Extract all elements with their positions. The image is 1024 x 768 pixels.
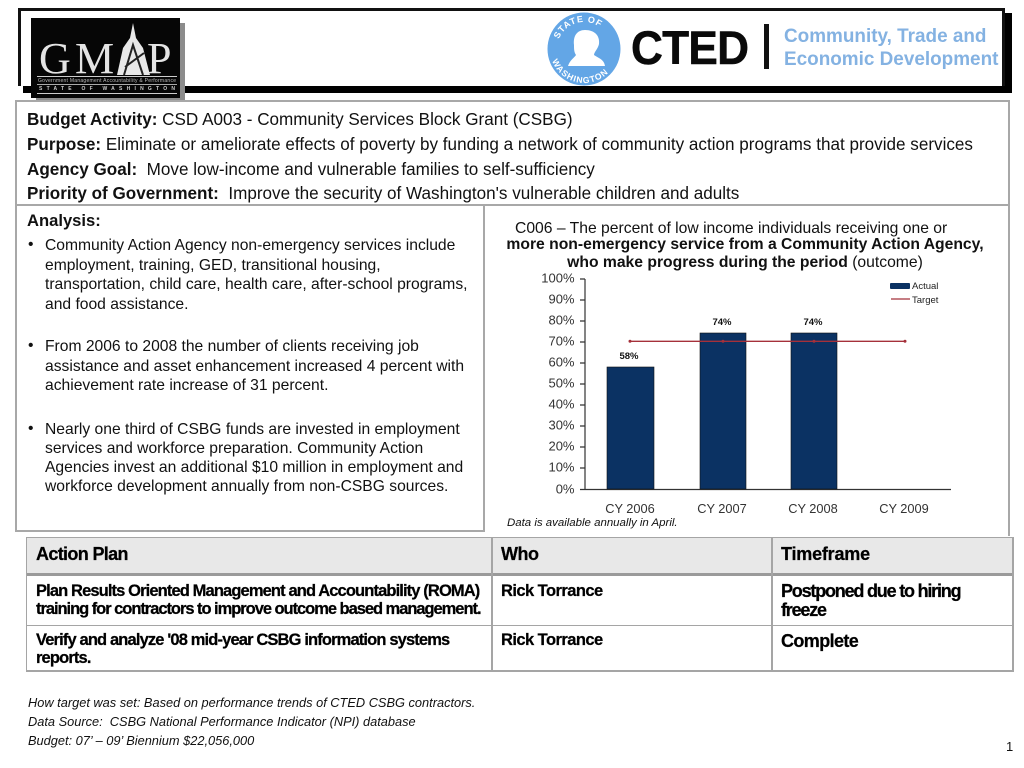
bullet 2: assistance and asset enhancement increased 4 percent with bbox=[45, 358, 464, 375]
logo: GMAP: M bbox=[75, 34, 114, 83]
y axis labels: 40% bbox=[548, 396, 575, 412]
chart title bbox=[506, 220, 984, 271]
y axis labels bbox=[541, 270, 575, 496]
bullet 3: • bbox=[28, 420, 33, 437]
bullet 3: Agencies invest an additional $10 million in employment and bbox=[45, 459, 463, 476]
icon: state of Washington seal bbox=[548, 12, 620, 86]
priority of government line: Priority of Government: Improve the security of Washington's vulnerable children and adults bbox=[27, 184, 739, 203]
bullet 3: workforce development annually from non-CSBG sources. bbox=[45, 478, 448, 495]
x axis labels: CY 2007 bbox=[697, 501, 747, 516]
header: who: Who bbox=[501, 544, 538, 564]
chart title: C006 – The percent of low income individuals receiving one or bbox=[515, 220, 947, 237]
legend: Target bbox=[912, 295, 939, 306]
legend bbox=[890, 281, 939, 306]
logo text: CTED: CTED bbox=[631, 21, 748, 74]
header banner bbox=[18, 8, 1012, 100]
row 2 who: Rick Torrance bbox=[501, 631, 603, 649]
banner frame bbox=[18, 8, 1005, 86]
row 1 action bbox=[36, 582, 481, 618]
logo: GMAP: STATE OF WASHINGTON bbox=[39, 86, 175, 92]
purpose line: Purpose: Eliminate or ameliorate effects of poverty by funding a network of community action programs that provide services bbox=[27, 135, 973, 154]
y axis labels: 10% bbox=[548, 460, 575, 474]
bullet 2: achievement rate increase of 31 percent. bbox=[45, 377, 328, 394]
row 1 action: Plan Results Oriented Management and Accountability (ROMA) bbox=[36, 582, 479, 600]
budget note: Budget: 07’ – 09’ Biennium $22,056,000 bbox=[28, 733, 254, 748]
header: action plan: Action Plan bbox=[36, 544, 128, 564]
logo text: department name: Community, Trade and bbox=[784, 25, 986, 47]
y axis labels: 80% bbox=[548, 312, 575, 328]
y axis labels: 70% bbox=[548, 334, 575, 348]
agency goal line: Agency Goal: Move low-income and vulnerable families to self-sufficiency bbox=[27, 160, 595, 179]
bullet 3: services and workforce preparation. Community Action bbox=[45, 440, 423, 457]
y axis labels: 60% bbox=[548, 354, 575, 370]
value labels bbox=[619, 317, 823, 362]
row 2 timeframe: Complete bbox=[781, 631, 858, 651]
icon: state of Washington seal: WASHINGTON bbox=[552, 58, 608, 84]
row 1 timeframe: freeze bbox=[781, 600, 826, 620]
x axis labels bbox=[605, 501, 929, 516]
footnotes bbox=[28, 695, 475, 748]
bars bbox=[607, 333, 837, 489]
chart note: Data is available annually in April. bbox=[507, 517, 678, 529]
x axis labels: CY 2006 bbox=[605, 501, 655, 516]
table header row bbox=[26, 537, 1014, 576]
row 1 who: Rick Torrance bbox=[501, 582, 603, 600]
row 2 action: Verify and analyze '08 mid-year CSBG information systems bbox=[36, 631, 449, 649]
action plan table bbox=[26, 537, 1014, 672]
row 2 action: reports. bbox=[36, 649, 91, 667]
legend: Actual bbox=[912, 281, 938, 292]
data source note: Data Source: CSBG National Performance Indicator (NPI) database bbox=[28, 714, 416, 729]
header: timeframe: Timeframe bbox=[781, 544, 870, 564]
bullet 1 bbox=[28, 236, 468, 312]
logo: GMAP bbox=[31, 18, 185, 100]
page number: 1 bbox=[1006, 739, 1013, 754]
bullet 1: transportation, child care, health care, after-school programs, bbox=[45, 276, 468, 293]
bullet 3: Nearly one third of CSBG funds are invested in employment bbox=[45, 421, 460, 438]
value labels: 58% bbox=[619, 351, 639, 362]
x axis labels: CY 2008 bbox=[788, 501, 838, 516]
bullet 1: and food assistance. bbox=[45, 296, 188, 312]
budget activity line: Budget Activity: CSD A003 - Community Services Block Grant (CSBG) bbox=[27, 110, 573, 129]
table outline and grid bbox=[26, 537, 1014, 672]
y axis labels: 0% bbox=[556, 482, 575, 496]
bullet 3 bbox=[28, 420, 463, 495]
target note: How target was set: Based on performance trends of CTED CSBG contractors. bbox=[28, 695, 475, 710]
bullet 1: employment, training, GED, transitional housing, bbox=[45, 256, 381, 274]
banner frame shadow bbox=[23, 13, 1012, 93]
axes bbox=[580, 279, 951, 490]
bullet 2 bbox=[28, 337, 464, 394]
logo: GMAP: Government Management Accountability & Performance bbox=[38, 78, 176, 84]
logo text: department name bbox=[784, 25, 998, 70]
analysis heading: Analysis: bbox=[27, 211, 101, 230]
icon: state of Washington seal: STATE OF bbox=[554, 16, 602, 38]
chart title: more non-emergency service from a Community Action Agency, bbox=[506, 236, 984, 253]
row 1 timeframe: Postponed due to hiring bbox=[781, 581, 960, 601]
row 1 action: training for contractors to improve outcome based management. bbox=[36, 600, 480, 618]
y axis labels: 100% bbox=[541, 270, 575, 286]
row 1 timeframe bbox=[781, 581, 961, 620]
y axis labels: 20% bbox=[548, 438, 575, 454]
y axis labels: 90% bbox=[548, 292, 575, 306]
row 2 action bbox=[36, 631, 450, 667]
bullet 2: • bbox=[28, 337, 33, 354]
y axis labels: 30% bbox=[548, 418, 575, 432]
logo: GMAP: G bbox=[39, 34, 71, 83]
logo: GMAP: P bbox=[147, 34, 171, 83]
bullet 2: From 2006 to 2008 the number of clients receiving job bbox=[45, 338, 419, 355]
bar chart: percent making progress bbox=[541, 270, 951, 516]
x axis labels: CY 2009 bbox=[879, 501, 929, 516]
value labels: 74% bbox=[712, 317, 732, 328]
chart title: who make progress during the period (outcome) bbox=[567, 254, 923, 271]
bullet 1: • bbox=[28, 236, 33, 253]
logo text: department name: Economic Development bbox=[784, 48, 998, 70]
logo divider bbox=[764, 24, 769, 69]
right panel outline bbox=[484, 204, 1010, 536]
y axis labels: 50% bbox=[548, 376, 575, 390]
panel: budget activity summary bbox=[15, 100, 1010, 206]
panel: analysis bbox=[15, 204, 485, 532]
bullet 1: Community Action Agency non-emergency services include bbox=[45, 237, 455, 254]
value labels: 74% bbox=[803, 317, 823, 328]
target line bbox=[628, 340, 906, 343]
